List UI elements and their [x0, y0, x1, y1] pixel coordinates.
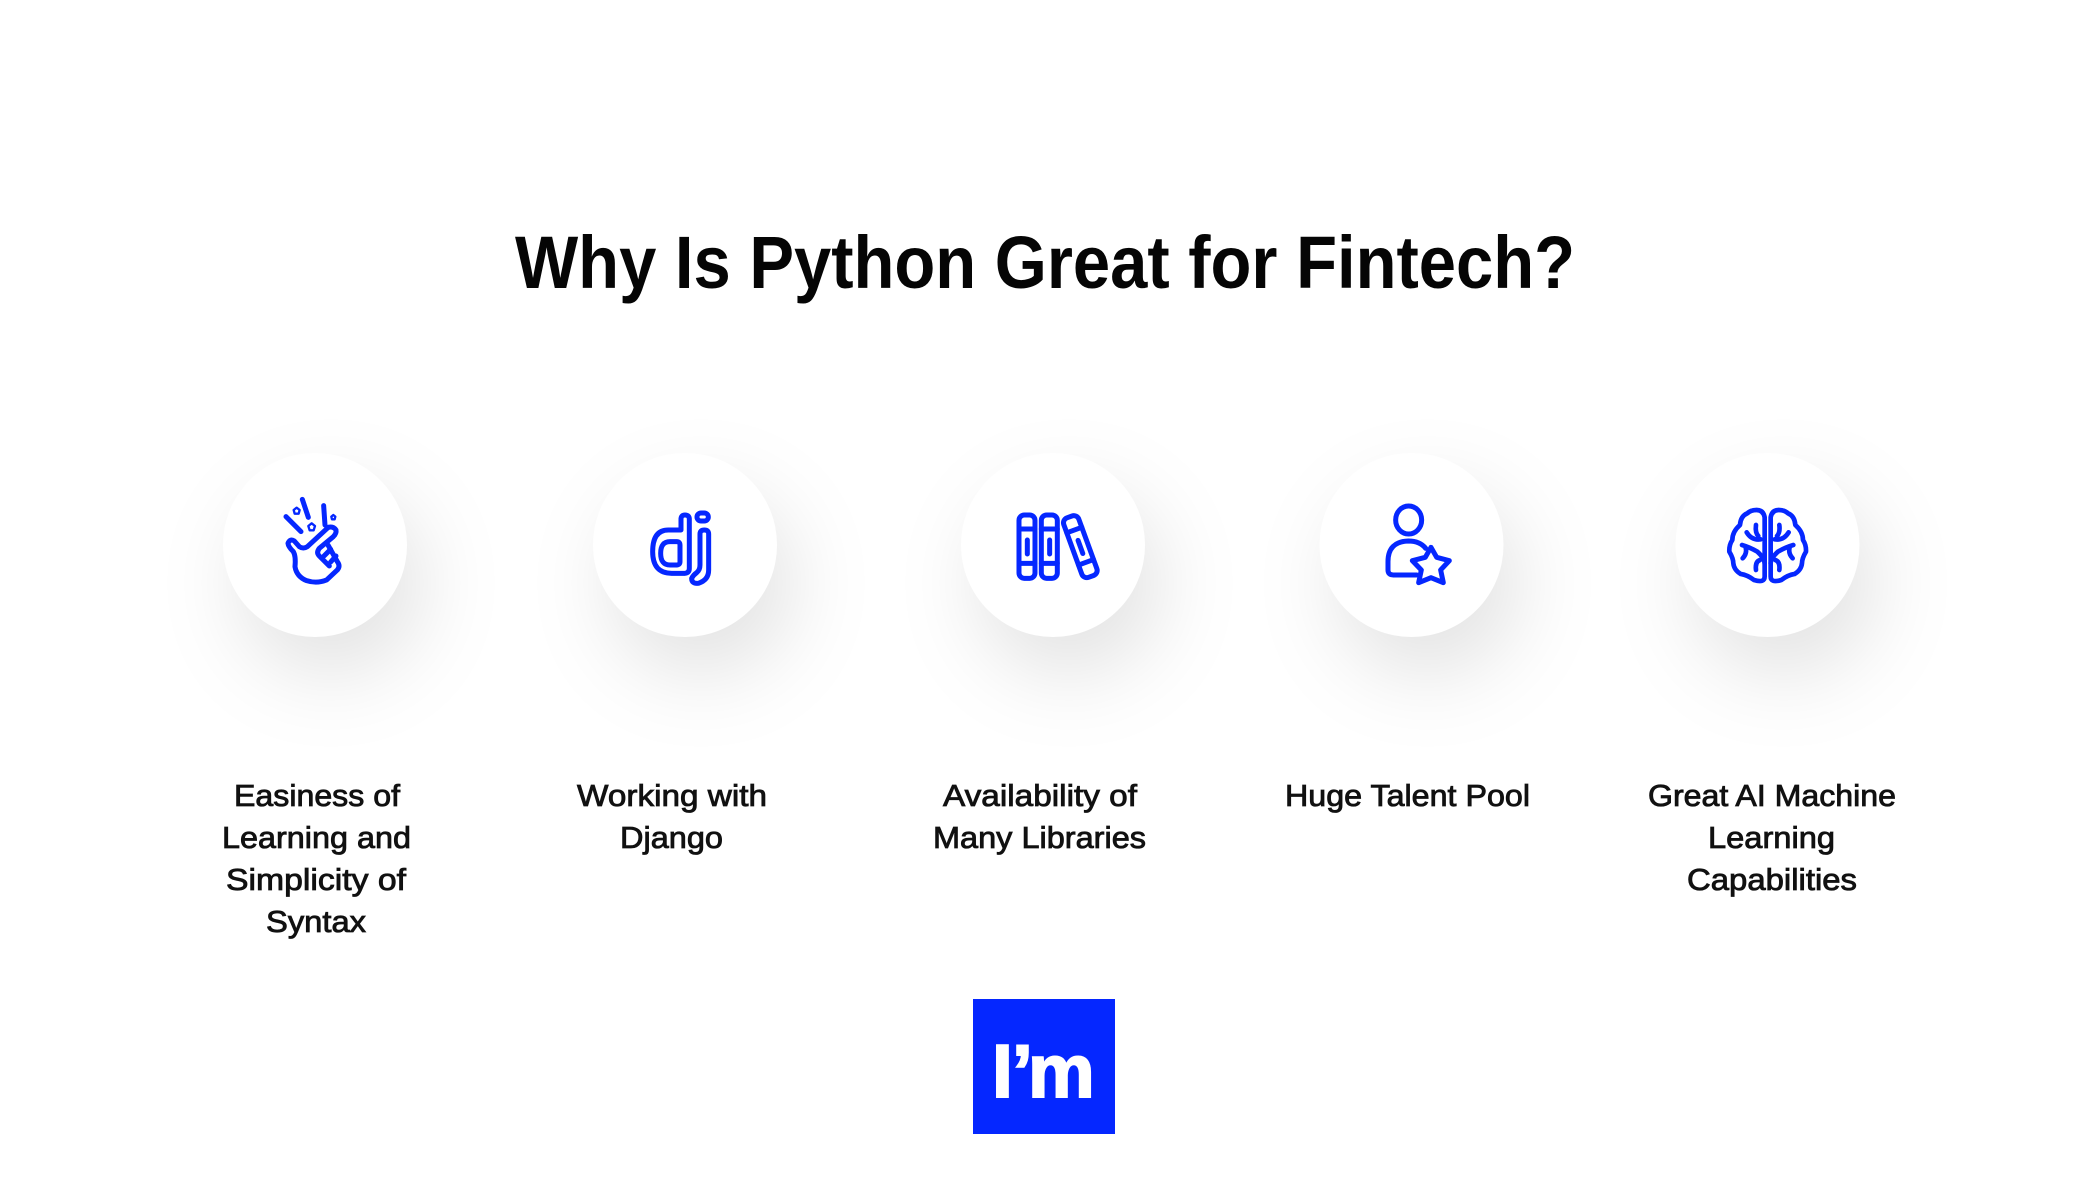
label: talent: Huge Talent Pool: [1285, 778, 1530, 813]
icon: finger snap: [286, 499, 339, 582]
logo: I’m: [992, 1029, 1095, 1113]
label: machine learning: Learning: [1708, 820, 1835, 855]
icon: dj: [653, 513, 709, 583]
label: easiness: [222, 778, 411, 939]
icon circle: machine learning: [1676, 453, 1860, 637]
label: machine learning: Capabilities: [1687, 862, 1857, 897]
title: Why Is Python Great for Fintech?: [515, 221, 1575, 304]
icon circle: libraries: [961, 453, 1145, 637]
icon circle: django: [593, 453, 777, 637]
logo: [973, 999, 1115, 1134]
label: machine learning: [1648, 778, 1896, 897]
label: django: [577, 778, 767, 855]
panel: easiness of learning: [222, 453, 411, 939]
label: easiness: Learning and: [222, 820, 411, 855]
panel: machine learning: [1648, 453, 1896, 897]
panel: talent pool: [1285, 453, 1530, 813]
label: libraries: Many Libraries: [933, 820, 1146, 855]
label: easiness: Easiness of: [234, 778, 400, 813]
label: django: Working with: [577, 778, 767, 813]
label: easiness: Syntax: [266, 904, 367, 939]
panel: libraries: [933, 453, 1146, 855]
label: django: Django: [620, 820, 723, 855]
panel: django: [577, 453, 777, 855]
icon circle: easiness: [223, 453, 407, 637]
icon: person with star: [1388, 506, 1449, 583]
icon: brain: [1729, 510, 1806, 581]
icon: books: [1019, 514, 1099, 579]
label: machine learning: Great AI Machine: [1648, 778, 1896, 813]
label: libraries: [933, 778, 1146, 855]
label: easiness: Simplicity of: [226, 862, 406, 897]
label: libraries: Availability of: [943, 778, 1137, 813]
icon circle: talent: [1320, 453, 1504, 637]
